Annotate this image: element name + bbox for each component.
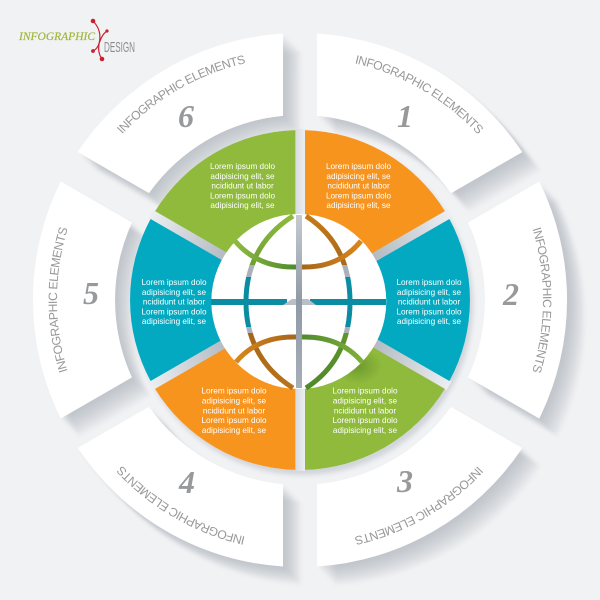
- text 4: adipisicing elit, se: [202, 426, 267, 435]
- text 4: adipisicing elit, se: [202, 396, 267, 406]
- text 4: Lorem ipsum dolo: [201, 416, 267, 425]
- title 2: INFOGRAPHIC ELEMENTS: [532, 228, 552, 373]
- number 3: 3: [396, 463, 413, 499]
- text 1: Lorem ipsum dolo: [326, 191, 391, 200]
- number 5: 5: [83, 275, 99, 311]
- text 1: adipisicing elit, se: [326, 201, 391, 210]
- colour sector shadow: [133, 135, 473, 475]
- globe vertical stripe: [296, 215, 302, 388]
- text 3: adipisicing elit, se: [333, 426, 398, 435]
- text 2: ncididunt ut labor: [398, 298, 460, 307]
- text 3: Lorem ipsum dolo: [332, 387, 398, 396]
- text 5: ncididunt ut labor: [143, 298, 205, 307]
- text 6: adipisicing elit, se: [210, 172, 275, 181]
- title 3: INFOGRAPHIC ELEMENTS: [355, 466, 483, 544]
- globe: [211, 214, 386, 389]
- text 1: ncididunt ut labor: [327, 182, 390, 191]
- number 4: 4: [178, 464, 195, 500]
- text 5: adipisicing elit, se: [142, 288, 207, 297]
- sector 5 teal: [80, 178, 291, 381]
- text 1: adipisicing elit, se: [326, 172, 391, 181]
- number 6: 6: [178, 98, 194, 134]
- sector 6 green: [155, 90, 366, 292]
- logo word infographic: INFOGRAPHIC: [18, 31, 95, 43]
- latitude top right: [302, 241, 361, 267]
- text 4: Lorem ipsum dolo: [201, 387, 267, 396]
- vertical gap stripe: [296, 129, 305, 471]
- colour sectors: [80, 90, 520, 510]
- sector 1 orange: [304, 130, 445, 292]
- title 4: INFOGRAPHIC ELEMENTS: [117, 466, 244, 545]
- text 1: Lorem ipsum dolo: [326, 162, 391, 171]
- title 1: INFOGRAPHIC ELEMENTS: [356, 55, 483, 134]
- text 3: Lorem ipsum dolo: [332, 416, 398, 425]
- text 3: ncididunt ut labor: [334, 406, 396, 415]
- title 5: INFOGRAPHIC ELEMENTS: [48, 227, 68, 372]
- latitude bottom right: [302, 337, 362, 362]
- number 1: 1: [397, 98, 413, 134]
- number 2: 2: [502, 276, 519, 312]
- sector 3 green: [234, 308, 445, 510]
- logo word design: DESIGN: [104, 40, 135, 56]
- latitude top left: [235, 241, 296, 267]
- equator right: [310, 299, 386, 305]
- text 6: ncididunt ut labor: [211, 182, 274, 191]
- centre wedges: [283, 299, 316, 305]
- longitude left: [246, 216, 293, 388]
- longitude right: [306, 216, 350, 388]
- text 4: ncididunt ut labor: [203, 406, 265, 415]
- lorem text blocks: [141, 162, 462, 435]
- text 6: adipisicing elit, se: [210, 201, 275, 210]
- text 5: Lorem ipsum dolo: [141, 307, 207, 316]
- text 2: adipisicing elit, se: [397, 288, 462, 297]
- text 2: Lorem ipsum dolo: [396, 278, 462, 287]
- text 6: Lorem ipsum dolo: [210, 162, 275, 171]
- globe disc: [211, 214, 386, 389]
- text 3: adipisicing elit, se: [333, 396, 398, 406]
- sector 2 teal: [309, 219, 520, 422]
- logo: [18, 19, 135, 61]
- globe shadow on green sector: [334, 348, 382, 384]
- text 5: adipisicing elit, se: [142, 317, 207, 326]
- text 2: Lorem ipsum dolo: [396, 307, 462, 316]
- latitude bottom left: [236, 337, 296, 362]
- numbers: [83, 98, 519, 500]
- text 2: adipisicing elit, se: [397, 317, 462, 326]
- text 5: Lorem ipsum dolo: [141, 278, 207, 287]
- title 6: INFOGRAPHIC ELEMENTS: [117, 56, 245, 134]
- text 6: Lorem ipsum dolo: [210, 191, 275, 200]
- logo red mark: [91, 19, 108, 61]
- spokes between colour sectors: [130, 130, 470, 470]
- sector 4 orange: [155, 308, 296, 470]
- equator left: [211, 299, 287, 305]
